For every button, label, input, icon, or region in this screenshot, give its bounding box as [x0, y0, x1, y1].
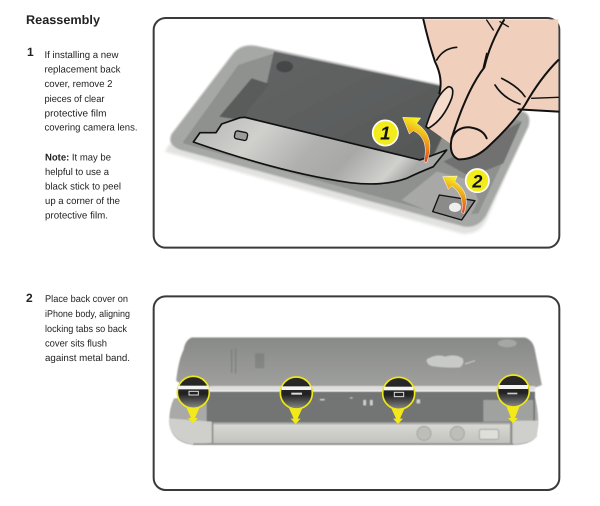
step 1 note: up a corner of the: [45, 196, 121, 207]
iPhone body: [169, 392, 538, 445]
arrow 2: [443, 176, 466, 213]
panel frame: [154, 18, 559, 248]
phone back cover illustration: [165, 45, 529, 234]
panel: seating back cover: [154, 296, 559, 490]
black protective film, dark side: [237, 52, 450, 163]
step 1 instructions: If installing a new: [44, 50, 119, 61]
step 1 instructions: pieces of clear: [44, 94, 105, 105]
camera hole: [276, 61, 293, 72]
step 1 note: black stick to peel: [45, 182, 121, 192]
callout 1: 1: [380, 123, 391, 144]
step 2 instructions: [45, 294, 130, 364]
step 1 number: 1: [27, 45, 34, 59]
camera lens film: [433, 195, 475, 220]
locking tab callout 3: [383, 377, 415, 424]
callout 2: [466, 169, 489, 192]
step 2 instructions: iPhone body, aligning: [45, 309, 130, 320]
panel frame: [154, 296, 559, 490]
step 2 instructions: locking tabs so back: [45, 324, 127, 335]
adhesive strip: [219, 78, 269, 120]
step 2 instructions: Place back cover on: [45, 294, 128, 305]
callout 1: [373, 120, 398, 146]
arrow 1: [403, 117, 430, 163]
locking tab callout 4: [497, 375, 529, 423]
locking tab callout 1: [177, 376, 209, 423]
locking tab callout 2: [280, 377, 312, 424]
peeled silver film: [193, 117, 447, 184]
step 1 note: Note: It may be: [45, 152, 112, 164]
step 2 number: 2: [26, 291, 33, 305]
step 1 instructions: cover, remove 2: [44, 79, 112, 90]
step 1 note: protective film.: [45, 211, 108, 222]
step 1 instructions: protective film: [44, 109, 106, 120]
hand: [423, 19, 558, 159]
step 2 instructions: cover sits flush: [45, 338, 107, 350]
step 1 instructions: replacement back: [44, 65, 121, 76]
panel: peeling protective film: [154, 18, 559, 248]
heading: Reassembly: Reassembly: [26, 13, 100, 27]
small film cut-out: [234, 130, 248, 141]
back cover glass: [176, 337, 542, 391]
camera window on cover: [498, 339, 517, 347]
Apple logo on cover: [427, 355, 463, 368]
step 1 instructions: covering camera lens.: [44, 123, 138, 134]
step 1 note: [45, 152, 121, 222]
callout 2: 2: [472, 171, 482, 191]
step 2 instructions: against metal band.: [45, 353, 130, 364]
vertical lettering on cover: [232, 348, 236, 373]
step 1 note: helpful to use a: [45, 167, 110, 178]
step 1 instructions: [44, 50, 138, 134]
